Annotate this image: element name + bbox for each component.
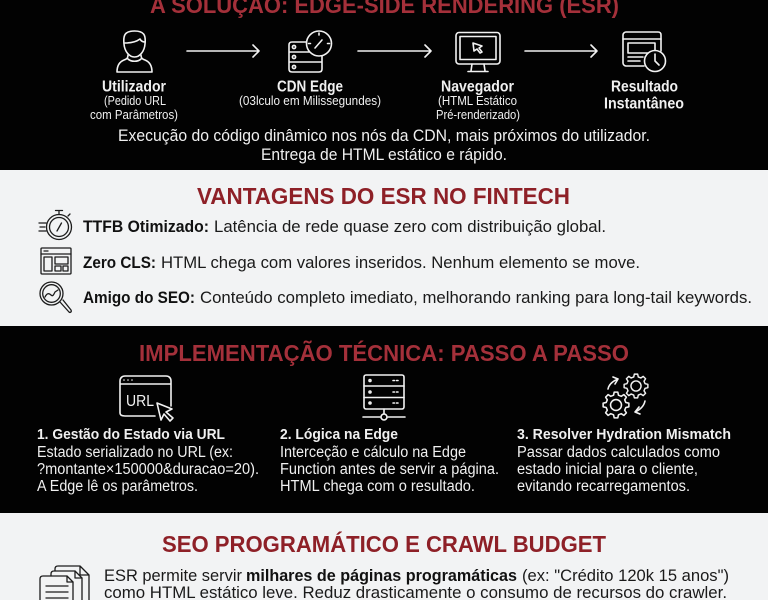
step 2 line 3: HTML chega com o resultado. bbox=[280, 478, 475, 495]
text: esr line end: (ex: "Crédito 120k 15 anos") bbox=[522, 566, 729, 585]
panel: vantagens bbox=[0, 170, 768, 326]
heading: implementação: IMPLEMENTAÇÃO TÉCNICA: PASSO A PASSO bbox=[139, 339, 629, 366]
panel: seo programático bbox=[0, 513, 768, 600]
text: ttfb: Latência de rede quase zero com distribuição global. bbox=[214, 217, 606, 236]
label: cdn edge: CDN Edge bbox=[277, 78, 343, 96]
heading: vantagens: VANTAGENS DO ESR NO FINTECH bbox=[197, 183, 570, 209]
label: utilizador: Utilizador bbox=[102, 78, 166, 96]
step 3 line 1: Passar dados calculados como bbox=[517, 444, 720, 461]
text: zero cls: HTML chega com valores inseridos. Nenhum elemento se move. bbox=[161, 253, 640, 272]
step 2 heading: 2. Lógica na Edge bbox=[280, 426, 398, 443]
panel: implementação bbox=[0, 326, 768, 513]
label: cálculo: (03lculo em Milissegundes) bbox=[239, 94, 381, 108]
icon: documents bbox=[40, 566, 89, 600]
step 2 line 2: Function antes de servir a página. bbox=[280, 461, 499, 478]
step 3 heading: 3. Resolver Hydration Mismatch bbox=[517, 426, 731, 443]
text: url label: URL bbox=[126, 393, 154, 410]
icon: url window bbox=[120, 376, 173, 421]
label: html estático: (HTML Estático bbox=[438, 94, 517, 108]
icon: browser monitor bbox=[456, 32, 500, 72]
text: zero cls bold: Zero CLS: bbox=[83, 253, 156, 272]
icon: stopwatch bbox=[39, 210, 72, 240]
icon: layout bbox=[41, 248, 71, 274]
label: resultado: Resultado bbox=[611, 78, 678, 96]
step 3 line 2: estado inicial para o cliente, bbox=[517, 461, 698, 478]
icon: magnifier bbox=[40, 282, 71, 312]
step 3 line 3: evitando recarregamentos. bbox=[517, 478, 690, 495]
panel: a solução bbox=[0, 0, 768, 170]
label: instantâneo: Instantâneo bbox=[604, 96, 684, 112]
label: pré-renderizado: Pré-renderizado) bbox=[436, 108, 520, 122]
text: ttfb bold: TTFB Otimizado: bbox=[83, 217, 209, 236]
text: esr bold: milhares de páginas programáticas bbox=[246, 566, 517, 585]
step 1 line 1: Estado serializado no URL (ex: bbox=[37, 444, 233, 461]
step 3 bbox=[517, 426, 731, 495]
icon: result window with clock bbox=[623, 32, 666, 72]
icon: cdn server with gauge bbox=[289, 31, 332, 72]
arrow: cdn to browser bbox=[358, 45, 431, 57]
step 1 heading: 1. Gestão do Estado via URL bbox=[37, 426, 225, 443]
text: amigo bold: Amigo do SEO: bbox=[83, 288, 195, 307]
icon: server bbox=[363, 375, 405, 420]
label: navegador: Navegador bbox=[441, 78, 514, 96]
icon: gears bbox=[603, 374, 648, 418]
step 1 bbox=[37, 426, 259, 495]
arrow: browser to result bbox=[525, 45, 597, 57]
step 1 line 2: ?montante×150000&duracao=20). bbox=[37, 461, 259, 478]
heading: seo programático: SEO PROGRAMÁTICO E CRAWL BUDGET bbox=[162, 530, 606, 557]
step 1 line 3: A Edge lê os parâmetros. bbox=[37, 478, 198, 495]
text: amigo: Conteúdo completo imediato, melhorando ranking para long-tail keywords. bbox=[200, 288, 752, 307]
step 2 line 1: Interceção e cálculo na Edge bbox=[280, 444, 466, 461]
text: entrega: Entrega de HTML estático e rápido. bbox=[261, 145, 507, 164]
arrow: user to cdn bbox=[187, 45, 259, 57]
text: execução: Execução do código dinâmico nos nós da CDN, mais próximos do utilizador. bbox=[118, 126, 650, 145]
label: pedido url: (Pedido URL bbox=[104, 94, 166, 108]
text: esr line start: ESR permite servir bbox=[104, 566, 242, 585]
icon: user bbox=[117, 31, 152, 72]
label: com parâmetros: com Parâmetros) bbox=[90, 108, 178, 122]
step 2 bbox=[280, 426, 499, 495]
